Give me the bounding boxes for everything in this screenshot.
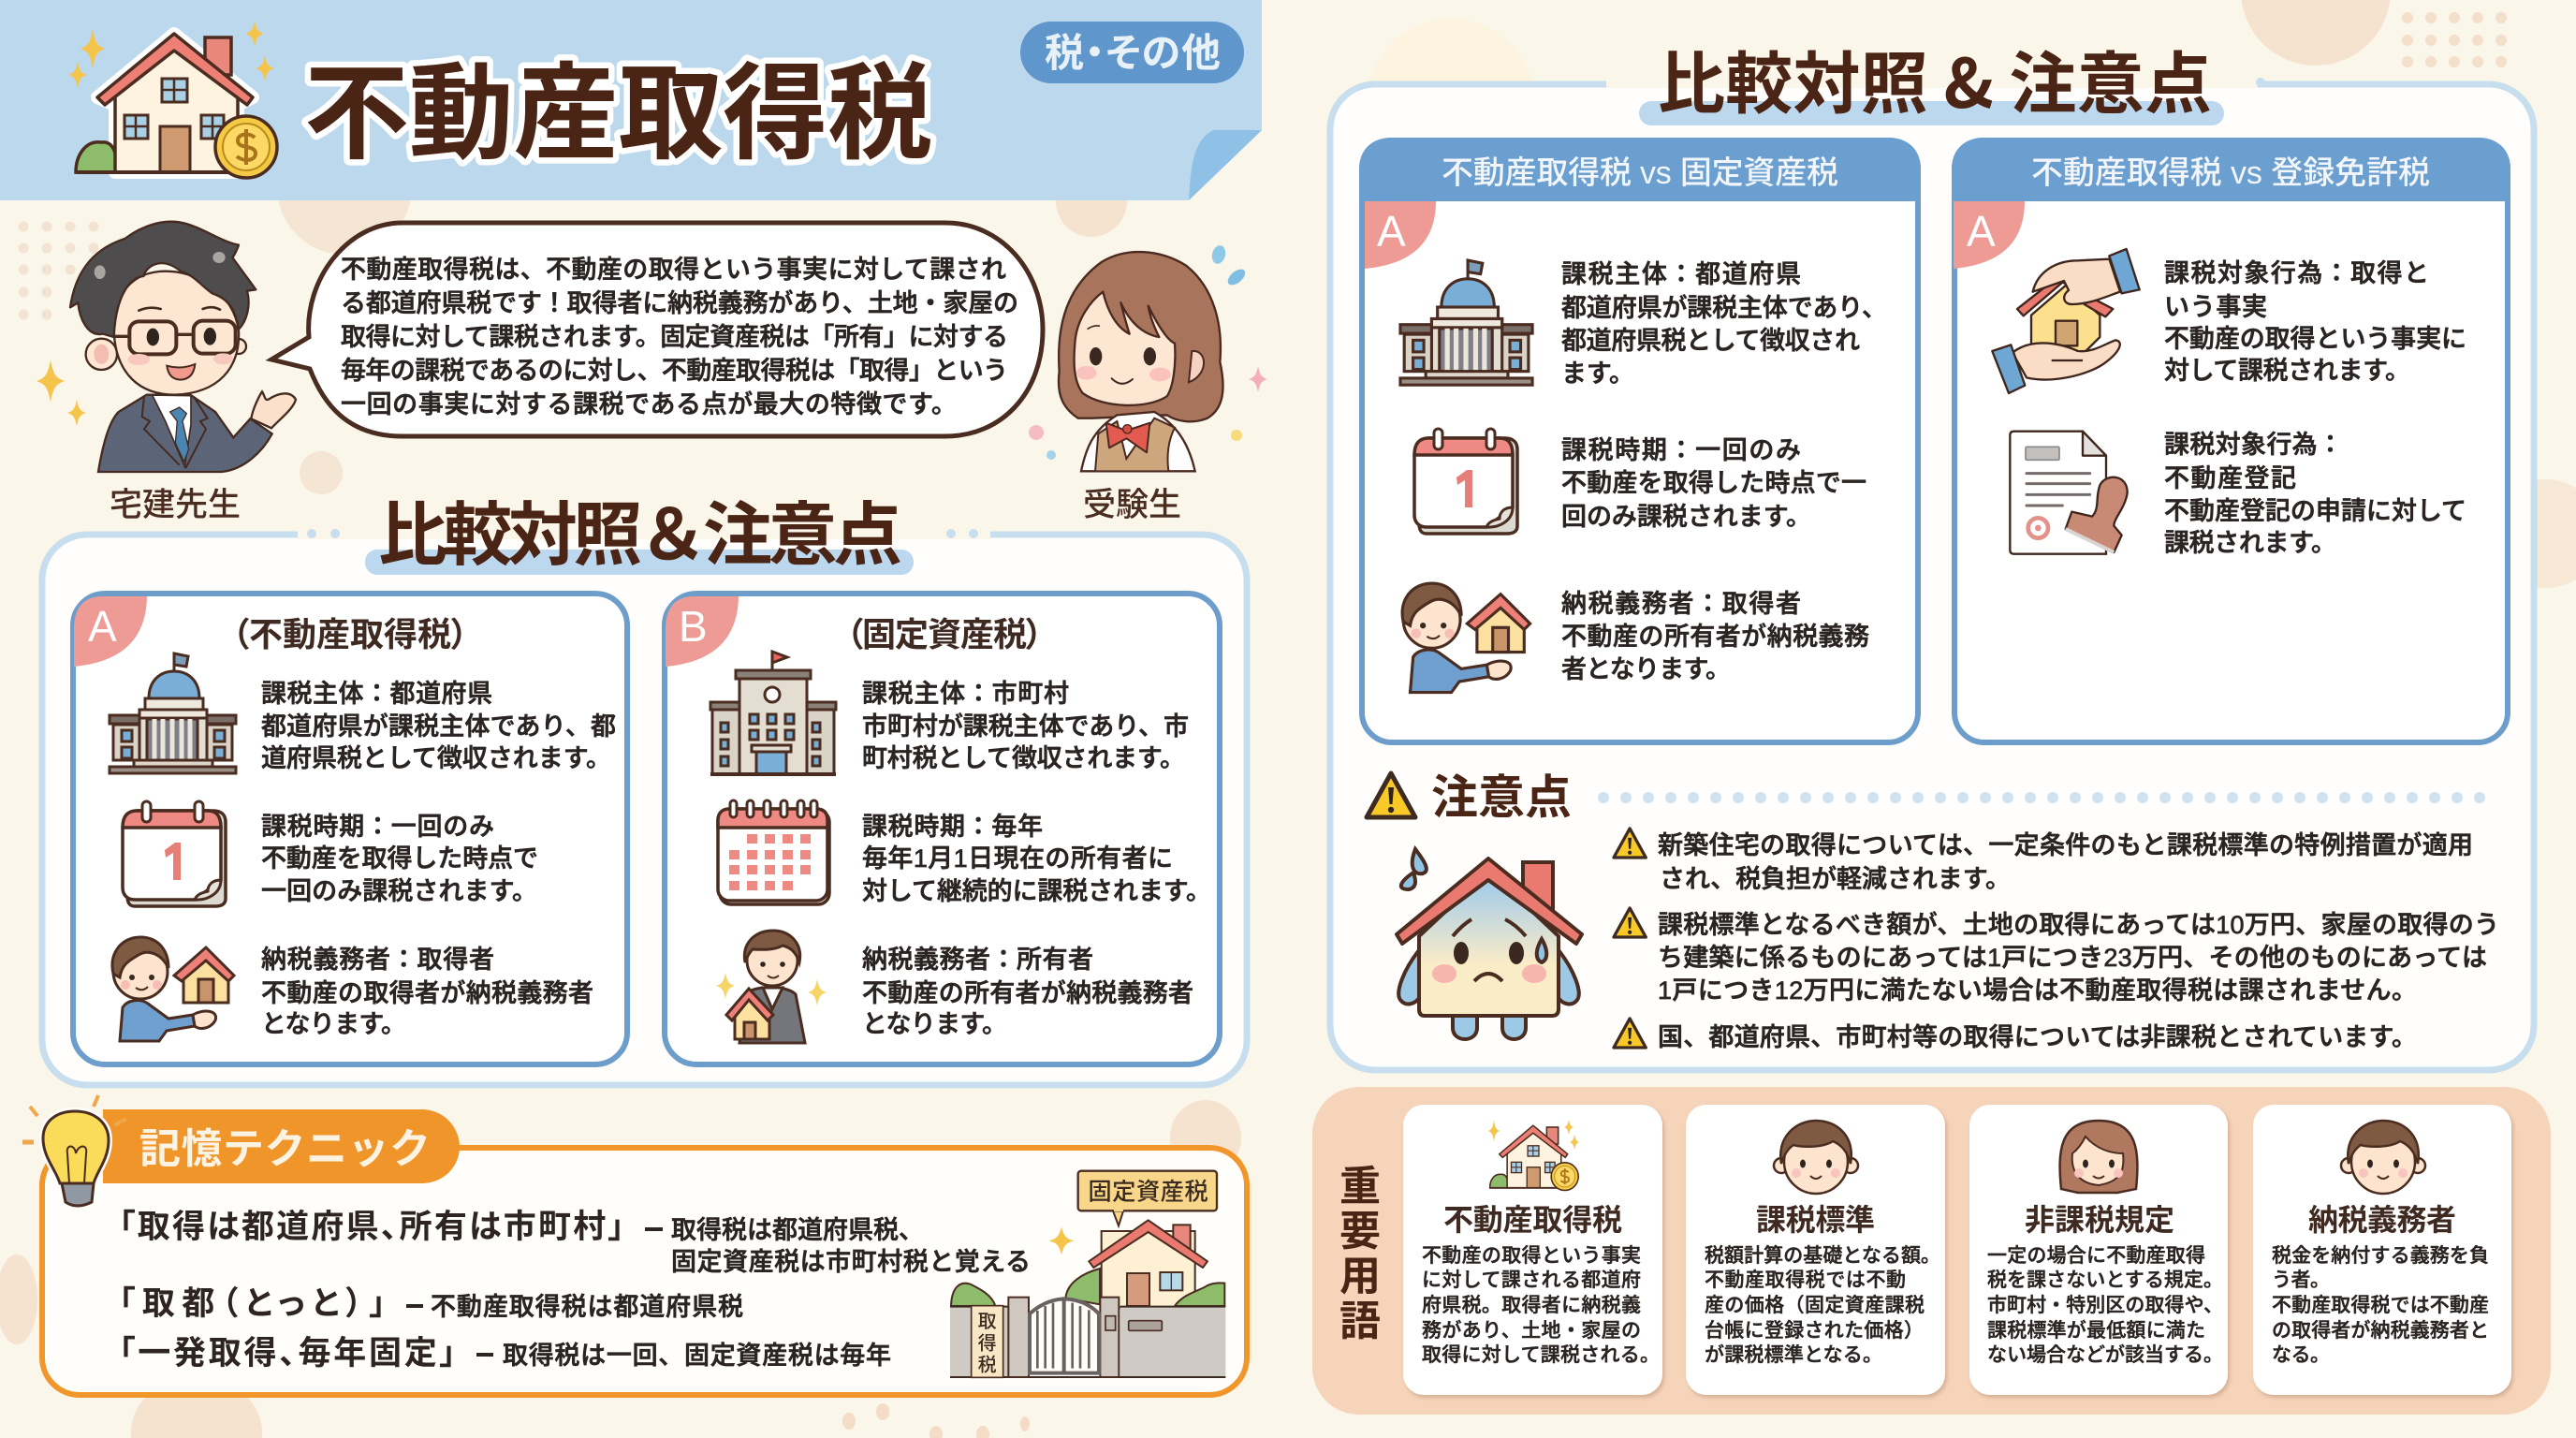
row: taxing body: 市町村が課税主体であり、市	[862, 712, 1189, 741]
icon: face girl	[2060, 1121, 2137, 1193]
fold corner	[1189, 130, 1262, 200]
heading: 比較対照＆注意点	[378, 479, 902, 580]
header banner	[0, 0, 1262, 200]
card header: 不動産取得税 vs 固定資産税	[1442, 155, 1838, 191]
term card 2: 不動産取得税では不動	[1705, 1269, 1906, 1291]
term card 1: に対して課される都道府	[1422, 1269, 1641, 1291]
row: 不動産の取得という事実に	[2164, 325, 2466, 353]
row: taxing body	[110, 653, 616, 773]
row: 都道府県が課税主体であり、	[1561, 294, 1887, 322]
label: key terms: 語	[1339, 1287, 1381, 1347]
badge B: B	[679, 602, 708, 651]
row: taxing body	[710, 652, 1189, 774]
card B	[665, 594, 1220, 1064]
badge	[1954, 201, 2025, 269]
student decorations	[1029, 244, 1267, 460]
illustration: gate and house: 税	[978, 1349, 997, 1376]
mnemonic 3: 「一発取得、毎年固定」	[119, 1335, 456, 1372]
row: taxpayer	[112, 937, 593, 1041]
row: 課税対象行為：	[2164, 431, 2343, 459]
row: timing: 毎年1月1日現在の所有者に	[862, 844, 1173, 873]
card header	[1952, 138, 2510, 201]
icon: light bulb	[22, 1095, 126, 1206]
badge A	[74, 596, 147, 667]
bubble text: 一回の事実に対する課税である点が最大の特徴です。	[341, 390, 957, 418]
mnemonic 2: 不動産取得税は都道府県税	[431, 1293, 743, 1321]
term card 3: 一定の場合に不動産取得	[1987, 1245, 2205, 1267]
term card 2	[1686, 1105, 1945, 1395]
row: timing: 課税時期：一回のみ	[261, 813, 494, 841]
row: 都道府県税として徴収され	[1561, 327, 1860, 355]
heading underline	[365, 550, 914, 575]
illustration: gate and house	[950, 1171, 1225, 1377]
panel: key terms	[1312, 1087, 2551, 1415]
row: taxpayer	[716, 931, 1193, 1043]
term card 4: 税金を納付する義務を負	[2272, 1245, 2489, 1267]
caution item 2	[1614, 908, 2499, 1005]
term card 1: 不動産の取得という事実	[1422, 1245, 1641, 1267]
term card 1: 府県税。取得者に納税義	[1422, 1295, 1641, 1316]
term card 3: ない場合などが該当する。	[1987, 1344, 2223, 1366]
tab	[103, 1109, 460, 1183]
caution item 1: され、税負担が軽減されます。	[1660, 865, 2011, 893]
row: 不動産登記の申請に対して	[2164, 497, 2466, 525]
term card 4: う者。	[2272, 1269, 2330, 1291]
heading underline	[1639, 101, 2224, 125]
row: 不動産を取得した時点で一	[1561, 469, 1866, 497]
term card 3: 税を課さないとする規定。	[1987, 1269, 2223, 1291]
bubble text: る都道府県税です！取得者に納税義務があり、土地・家屋の	[341, 289, 1018, 317]
card: vs registration tax	[1952, 138, 2510, 742]
term card 4: 不動産取得税では不動産	[2272, 1295, 2489, 1316]
badge: A	[1967, 207, 1996, 256]
row	[1414, 429, 1866, 534]
row: taxing body: 課税主体：都道府県	[261, 680, 492, 708]
row: taxing body: 都道府県が課税主体であり、都	[261, 712, 616, 741]
term card 1: 不動産取得税	[1443, 1203, 1622, 1237]
icon: house with coin	[68, 21, 277, 178]
card title: （不動産取得税）	[232, 615, 468, 653]
term card 1: 務があり、土地・家屋の	[1422, 1320, 1641, 1342]
caution item 2: 課税標準となるべき額が、土地の取得にあっては10万円、家屋の取得のう	[1658, 911, 2499, 939]
card title: （固定資産税）	[846, 615, 1043, 653]
caution item 1	[1614, 829, 2473, 893]
row: 課税されます。	[2164, 529, 2336, 557]
row: taxing body: 町村税として徴収されます。	[862, 744, 1185, 772]
row: timing: 不動産を取得した時点で	[261, 844, 538, 873]
card header	[1359, 138, 1921, 201]
row	[1400, 259, 1887, 388]
row: いう事実	[2164, 293, 2267, 321]
row: 者となります。	[1561, 655, 1731, 683]
card header: 不動産取得税 vs 登録免許税	[2031, 155, 2430, 191]
row: taxing body: 課税主体：市町村	[862, 680, 1069, 708]
label: teacher: 宅建先生	[110, 478, 241, 526]
mnemonic 3: 取得税は一回、固定資産税は毎年	[503, 1342, 891, 1370]
row: taxpayer: 不動産の取得者が納税義務者	[261, 979, 593, 1007]
mnemonic 1: 固定資産税は市町村税と覚える	[671, 1248, 1031, 1276]
term card 2: 台帳に登録された価格）	[1705, 1320, 1924, 1342]
illustration: gate and house: 取	[978, 1306, 997, 1333]
term card 3: 課税標準が最低額に満た	[1987, 1320, 2205, 1342]
icon: worried house character	[1397, 849, 1582, 1039]
bubble text: 取得に対して課税されます。固定資産税は「所有」に対する	[341, 323, 1008, 351]
label: key terms: 用	[1339, 1242, 1381, 1302]
row: 不動産登記	[2164, 464, 2296, 492]
term card 3	[1969, 1105, 2228, 1395]
bubble text: 毎年の課税であるのに対し、不動産取得税は「取得」という	[341, 357, 1008, 385]
panel: comparison A/B	[42, 479, 1247, 1085]
title: 不動産取得税	[304, 29, 932, 181]
row: 課税時期：一回のみ	[1561, 436, 1801, 464]
caution heading	[1367, 760, 1572, 828]
row: 課税対象行為：取得と	[2164, 259, 2429, 287]
row: timing: 課税時期：毎年	[862, 813, 1043, 841]
row: taxpayer: 不動産の所有者が納税義務者	[862, 979, 1193, 1007]
tab: 記憶テクニック	[139, 1115, 431, 1175]
term card 3: 市町村・特別区の取得や、	[1987, 1295, 2223, 1316]
term card 1	[1403, 1105, 1662, 1395]
row: 納税義務者：取得者	[1561, 590, 1801, 618]
badge: A	[1377, 207, 1406, 256]
label: student: 受験生	[1083, 478, 1181, 526]
term card 4: の取得者が納税義務者と	[2272, 1320, 2489, 1342]
mnemonic 2: 「取都（とっと）」	[119, 1285, 386, 1322]
label: key terms: 要	[1339, 1197, 1381, 1257]
row	[2010, 431, 2466, 557]
caution item 2: 1戸につき12万円に満たない場合は不動産取得税は課されません。	[1658, 976, 2417, 1005]
card A	[73, 594, 627, 1064]
bubble text	[341, 256, 1018, 418]
caution heading: 注意点	[1431, 760, 1572, 828]
bubble text: 不動産取得税は、不動産の取得という事実に対して課され	[341, 256, 1006, 284]
term card 1: 取得に対して課税される。	[1422, 1344, 1660, 1366]
category tag: 税・その他	[1045, 22, 1221, 79]
row: taxpayer: 納税義務者：所有者	[862, 946, 1093, 974]
character: teacher	[70, 222, 296, 472]
term card 2: 課税標準	[1756, 1203, 1875, 1237]
speech bubble	[271, 223, 1043, 436]
teacher sparkles	[37, 360, 86, 426]
card: vs fixed asset tax	[1359, 138, 1921, 742]
row	[1992, 249, 2466, 393]
term card 2: 産の価格（固定資産課税	[1705, 1295, 1925, 1316]
row: timing	[123, 801, 538, 906]
character: student	[1059, 252, 1223, 471]
heading: 比較対照 & 注意点	[1658, 29, 2212, 127]
icon: face	[2341, 1121, 2425, 1194]
panel: right comparison and cautions	[1330, 29, 2534, 1070]
term card 3: 非課税規定	[2025, 1203, 2174, 1237]
icon: face	[1774, 1121, 1858, 1194]
badge A: A	[88, 602, 117, 651]
row: timing	[718, 800, 1211, 905]
mnemonic 3	[119, 1335, 891, 1372]
row: 対して課税されます。	[2164, 357, 2410, 385]
row: taxpayer: 納税義務者：取得者	[261, 946, 494, 974]
row: timing: 対して継続的に課税されます。	[862, 877, 1211, 905]
term card 4: 納税義務者	[2308, 1203, 2456, 1237]
icon: house	[1488, 1120, 1579, 1191]
caution item 3: 国、都道府県、市町村等の取得については非課税とされています。	[1658, 1023, 2417, 1051]
caution item 1: 新築住宅の取得については、一定条件のもと課税標準の特例措置が適用	[1658, 831, 2473, 859]
sign: 固定資産税	[1088, 1174, 1208, 1208]
label: key terms: 重	[1339, 1152, 1381, 1212]
row	[1402, 583, 1869, 693]
row: 不動産の所有者が納税義務	[1561, 623, 1869, 651]
mnemonic 1: 取得税は都道府県税、	[671, 1216, 924, 1244]
row: taxing body: 道府県税として徴収されます。	[261, 744, 611, 772]
term card 4: なる。	[2272, 1344, 2330, 1366]
mnemonic 1	[119, 1209, 1031, 1276]
caution item 2: ち建築に係るものにあっては1戸につき23万円、その他のものにあっては	[1658, 944, 2487, 972]
badge B	[666, 596, 739, 667]
mnemonic 1: 「取得は都道府県、所有は市町村」	[119, 1209, 624, 1245]
row: ます。	[1561, 360, 1634, 388]
illustration: gate and house: 得	[978, 1328, 997, 1355]
row: 課税主体：都道府県	[1561, 260, 1801, 288]
row: timing: 一回のみ課税されます。	[261, 877, 537, 905]
row: taxpayer: となります。	[261, 1010, 406, 1038]
panel: memory technique	[22, 1095, 1247, 1395]
row: taxpayer: となります。	[862, 1010, 1007, 1038]
term card 4	[2253, 1105, 2511, 1395]
badge	[1365, 201, 1436, 269]
row: 回のみ課税されます。	[1561, 503, 1811, 531]
term card 2: が課税標準となる。	[1705, 1344, 1882, 1366]
term card 2: 税額計算の基礎となる額。	[1705, 1245, 1940, 1267]
mnemonic 2	[119, 1285, 743, 1322]
sign	[1078, 1171, 1217, 1225]
